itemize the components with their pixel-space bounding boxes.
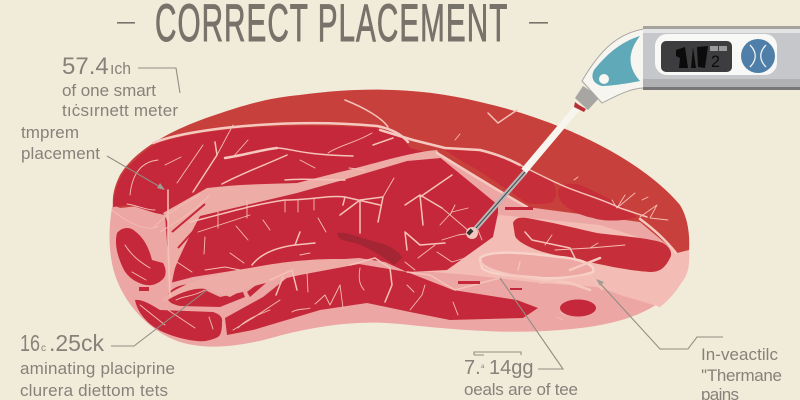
- callout: top left reading: of one smart: [62, 81, 156, 100]
- callout: bottom left reading: aminating placiprine: [20, 359, 175, 378]
- thermometer body: [643, 26, 800, 90]
- muscle: right middle lobe: [558, 184, 637, 221]
- muscle: bottom left lobe: [135, 300, 222, 341]
- callout: temp placement: tmprem: [21, 123, 79, 142]
- callout: bottom centre reading: oeals are of tee: [464, 380, 578, 399]
- teal grip: [592, 36, 640, 86]
- screen: [661, 41, 732, 72]
- muscle: right upper lobe: [445, 150, 556, 204]
- handle head: [582, 29, 644, 103]
- pale lobe: [480, 253, 593, 278]
- fat band: upper: [163, 150, 441, 292]
- muscle: small lower lobe: [168, 284, 245, 307]
- callout: temp placement: placement: [21, 144, 100, 163]
- fat band: red web: [172, 204, 205, 248]
- dark blood smear: [337, 233, 402, 265]
- round button: [741, 39, 775, 73]
- marbling veins: [112, 100, 676, 330]
- muscle: bottom long strip: [225, 263, 538, 335]
- probe metal tip: [466, 172, 525, 239]
- muscle: upper left and central: [113, 126, 498, 283]
- callout: bottom centre reading: [464, 278, 578, 399]
- callout: bottom left reading: .25ck: [49, 330, 104, 356]
- thermometer: [466, 26, 800, 239]
- grip dot: [599, 74, 609, 84]
- callout: top left reading: ıch: [110, 59, 131, 78]
- probe collar: [574, 86, 600, 112]
- screen readout: 2: [711, 52, 720, 71]
- callout: right side label: ''Thermane: [701, 366, 782, 385]
- callout: bottom left reading: [20, 290, 207, 400]
- callout: right side label: In-veactilc: [701, 345, 778, 364]
- muscle: small oval: [560, 300, 596, 316]
- callout: bottom left reading: 16: [20, 330, 40, 356]
- outer fat layer: [110, 90, 689, 347]
- callout: bottom centre reading: a: [481, 364, 485, 370]
- muscle: right large lobe: [513, 218, 671, 272]
- callout: bottom left reading: clurera diettom tets: [20, 381, 168, 400]
- meat cut illustration: [110, 90, 689, 347]
- top red band: [113, 90, 689, 253]
- callout: top left reading: [62, 53, 180, 120]
- probe white shaft: [524, 108, 577, 171]
- callout: temp placement: [21, 123, 165, 190]
- callout: top left reading: tıċsırnett meter: [62, 101, 178, 120]
- callout: right side label: [596, 279, 782, 400]
- display bezel: [655, 34, 777, 75]
- callout: bottom centre reading: 14gg: [489, 357, 534, 379]
- screen readout: [676, 46, 727, 71]
- callout: bottom left reading: c: [41, 343, 46, 354]
- fat band: lower: [163, 259, 359, 303]
- wedge muscle: [247, 272, 275, 297]
- pale fat zone: [407, 215, 689, 307]
- muscle: left lobe: [116, 228, 166, 285]
- callout: top left reading: 57.4: [62, 53, 109, 80]
- callout: bottom centre reading: 7.: [464, 357, 481, 379]
